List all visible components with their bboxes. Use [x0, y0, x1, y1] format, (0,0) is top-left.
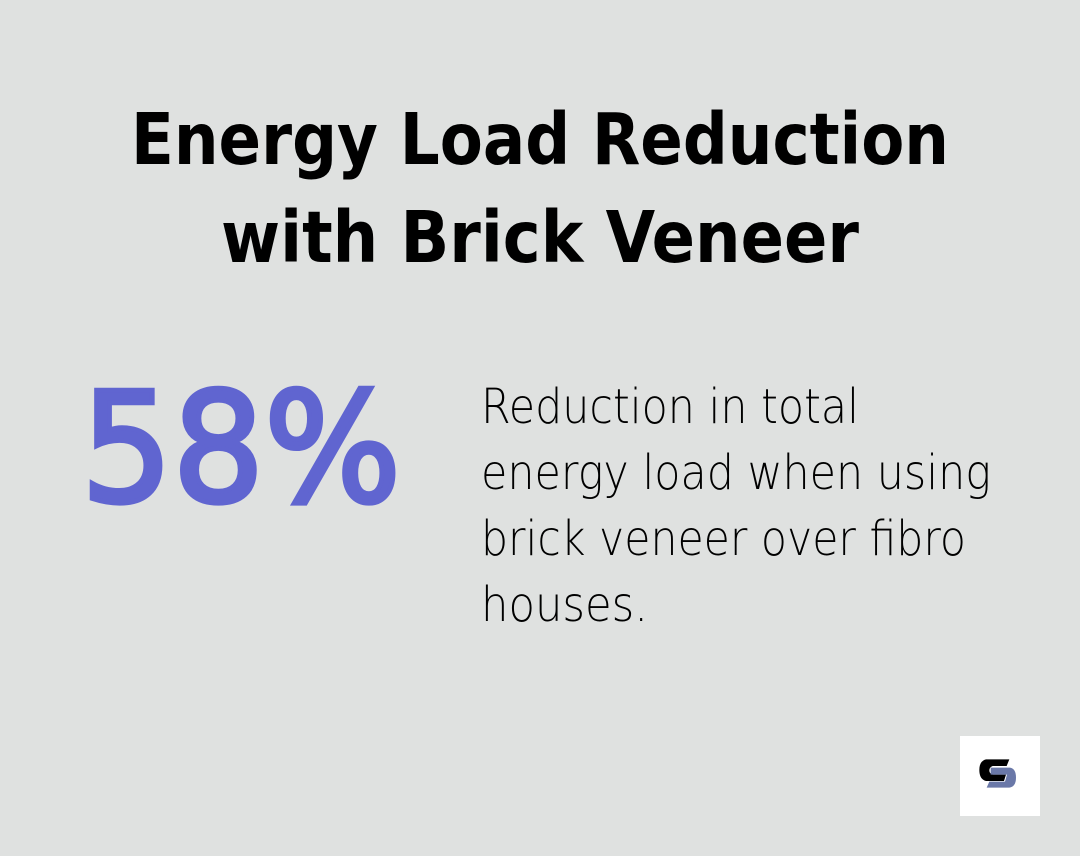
logo badge: [960, 736, 1040, 816]
description text: houses.: [481, 577, 648, 633]
title: [131, 98, 949, 279]
description text: brick veneer over fibro: [481, 511, 966, 567]
title: with Brick Veneer: [221, 196, 859, 279]
description text: Reduction in total: [481, 379, 859, 435]
icon: logo mark: [979, 759, 1016, 788]
title: Energy Load Reduction: [131, 98, 949, 181]
description text: energy load when using: [481, 445, 991, 501]
description text: [481, 379, 991, 633]
statistic: 58%: 58%: [81, 360, 401, 537]
